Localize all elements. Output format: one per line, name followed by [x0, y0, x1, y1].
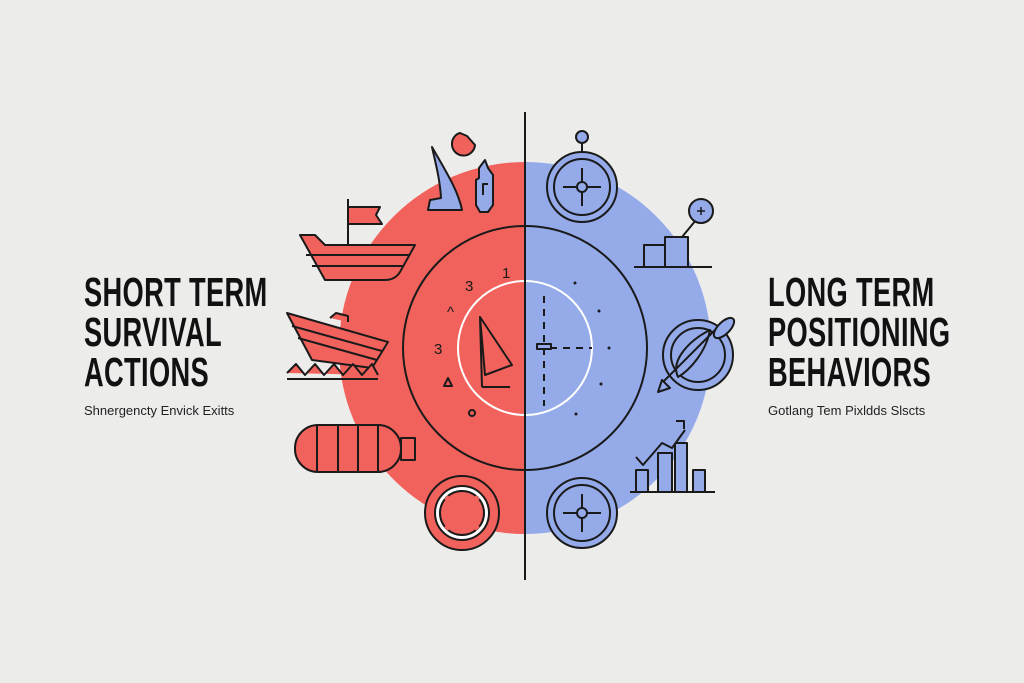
- icon: step chart: [634, 199, 713, 267]
- inner ring: [403, 226, 647, 470]
- blue half circle: [525, 162, 711, 534]
- center left marks: 3: [434, 341, 442, 358]
- icon: bar chart: [630, 421, 715, 492]
- right center crosshair: [544, 296, 592, 406]
- subtitle right: Gotlang Tem Pixldds Slscts: [768, 403, 925, 418]
- heading: long term: LONG TERM: [768, 269, 935, 315]
- icon: tilted boat: [287, 313, 388, 379]
- icon: compass bottom: [547, 478, 617, 548]
- heading: short term: [84, 269, 268, 395]
- center left marks: ^: [447, 304, 454, 321]
- center left marks: [434, 265, 510, 358]
- center marks shapes: [444, 317, 512, 416]
- icon: sail: [428, 147, 462, 210]
- icon: bottle: [476, 160, 493, 212]
- center left marks: 1: [502, 265, 510, 282]
- icon: life ring: [425, 476, 499, 550]
- heading: short term: ACTIONS: [84, 349, 209, 395]
- divider: [524, 112, 526, 580]
- center left marks: 3: [465, 278, 473, 295]
- heading: short term: SURVIVAL: [84, 309, 222, 355]
- heading: long term: POSITIONING: [768, 309, 950, 355]
- heading: short term: SHORT TERM: [84, 269, 268, 315]
- icon: drop: [452, 133, 475, 156]
- icon: target leaf: [658, 315, 737, 392]
- heading: long term: BEHAVIORS: [768, 349, 931, 395]
- white ring: [458, 281, 592, 415]
- subtitle left: Shnergencty Envick Exitts: [84, 403, 234, 418]
- icon: tank: [295, 425, 415, 472]
- icon: compass top: [547, 131, 617, 222]
- red half circle: [339, 162, 525, 534]
- heading: long term: [768, 269, 950, 395]
- icon: flag boat: [300, 199, 415, 280]
